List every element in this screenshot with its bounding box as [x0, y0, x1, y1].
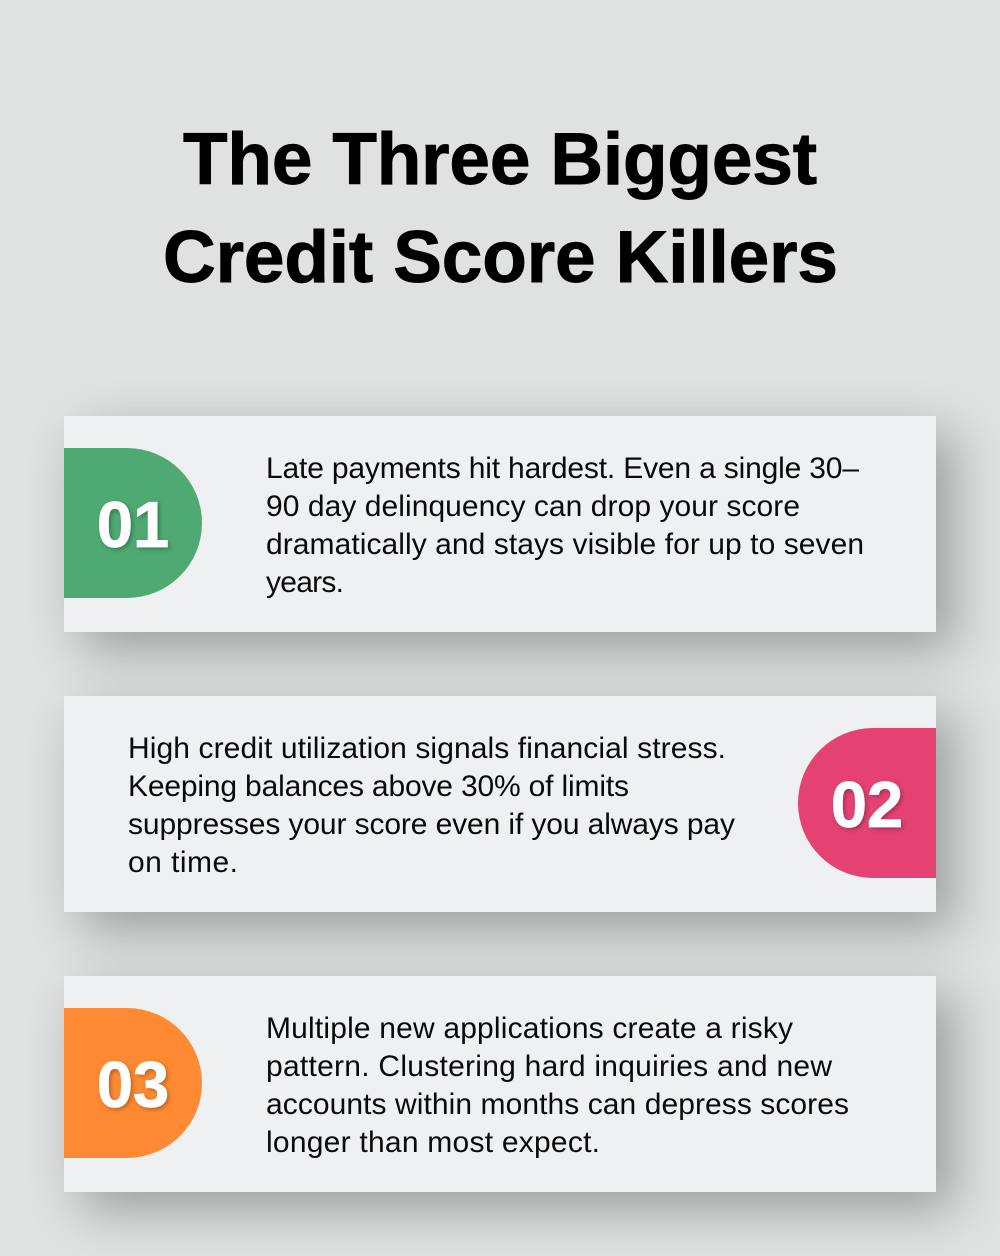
badge: 03: 03: [97, 1048, 169, 1121]
panel: new applications: [64, 976, 936, 1192]
text block: high utilization: suppresses your score even if you always pay: [128, 808, 735, 841]
text block: late payments: dramatically and stays visible for up to seven: [266, 528, 864, 561]
badge: 01: [64, 448, 202, 598]
text block: new applications: accounts within months can depress scores: [266, 1088, 849, 1121]
text block: high utilization: [128, 732, 735, 879]
title: The Three Biggest: [183, 119, 817, 200]
badge: 02: [798, 728, 936, 878]
text block: high utilization: on time.: [128, 846, 238, 879]
title: Credit Score Killers: [163, 217, 838, 298]
badge: 03: [64, 1008, 202, 1158]
text block: new applications: Multiple new applications create a risky: [266, 1012, 793, 1045]
text block: high utilization: High credit utilization signals financial stress.: [128, 732, 726, 765]
text block: new applications: longer than most expect.: [266, 1126, 600, 1159]
panel: high utilization: [64, 696, 936, 912]
text block: late payments: [266, 452, 864, 599]
text block: late payments: 90 day delinquency can drop your score: [266, 490, 800, 523]
text block: late payments: Late payments hit hardest. Even a single 30–: [266, 452, 859, 485]
panel: late payments: [64, 416, 936, 632]
text block: new applications: pattern. Clustering hard inquiries and new: [266, 1050, 832, 1083]
badge: 02: 02: [831, 768, 903, 841]
badge: 01: 01: [97, 488, 169, 561]
text block: new applications: [266, 1012, 849, 1159]
text block: late payments: years.: [266, 566, 344, 599]
title: [163, 119, 838, 298]
text block: high utilization: Keeping balances above 30% of limits: [128, 770, 629, 803]
